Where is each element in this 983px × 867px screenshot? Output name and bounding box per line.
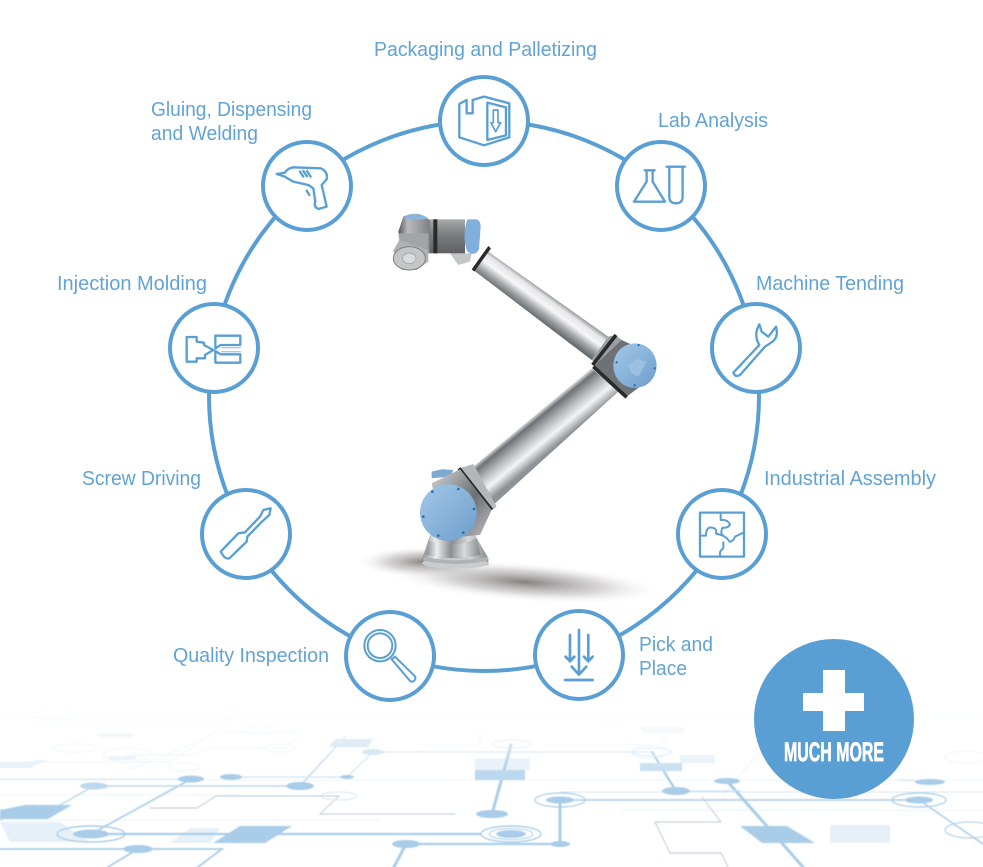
application: gluing, dispensing and welding: and Welding	[151, 123, 258, 145]
application: injection molding	[57, 273, 258, 392]
base joint	[420, 469, 492, 541]
wrist and tool flange	[393, 214, 481, 270]
label: Lab Analysis	[658, 110, 768, 132]
label: Industrial Assembly	[764, 468, 936, 490]
application: machine tending	[712, 273, 904, 392]
main traces	[91, 833, 511, 835]
label: Screw Driving	[82, 468, 201, 490]
upper arm	[472, 246, 627, 365]
callout: much more: MUCH MORE	[784, 737, 884, 767]
lower arm	[459, 368, 618, 515]
robot shadow	[355, 546, 666, 612]
icon: plus	[803, 670, 864, 731]
label: Quality Inspection	[173, 645, 329, 667]
application: lab analysis	[617, 110, 768, 230]
base	[422, 535, 489, 569]
label: Gluing, Dispensing	[151, 99, 312, 121]
application: screw driving	[82, 468, 290, 578]
label: Machine Tending	[756, 273, 904, 295]
application: pick and place: Place	[639, 658, 687, 680]
background: circuit board pattern	[0, 705, 983, 867]
rings	[57, 826, 125, 842]
application: gluing, dispensing and welding	[151, 99, 351, 230]
application: pick and place	[535, 611, 713, 699]
elbow joint	[593, 340, 657, 397]
label: Pick and	[639, 634, 713, 656]
application: industrial assembly	[678, 468, 936, 578]
dots	[0, 739, 945, 853]
label: Injection Molding	[57, 273, 207, 295]
main ring connecting the application circles	[209, 121, 759, 671]
robot arm	[393, 214, 657, 569]
label: Packaging and Palletizing	[374, 39, 597, 61]
callout: much more	[754, 639, 914, 799]
application: packaging and palletizing	[374, 39, 597, 165]
application: quality inspection	[173, 612, 434, 700]
squares	[213, 826, 292, 843]
thin detail traces	[150, 796, 728, 867]
